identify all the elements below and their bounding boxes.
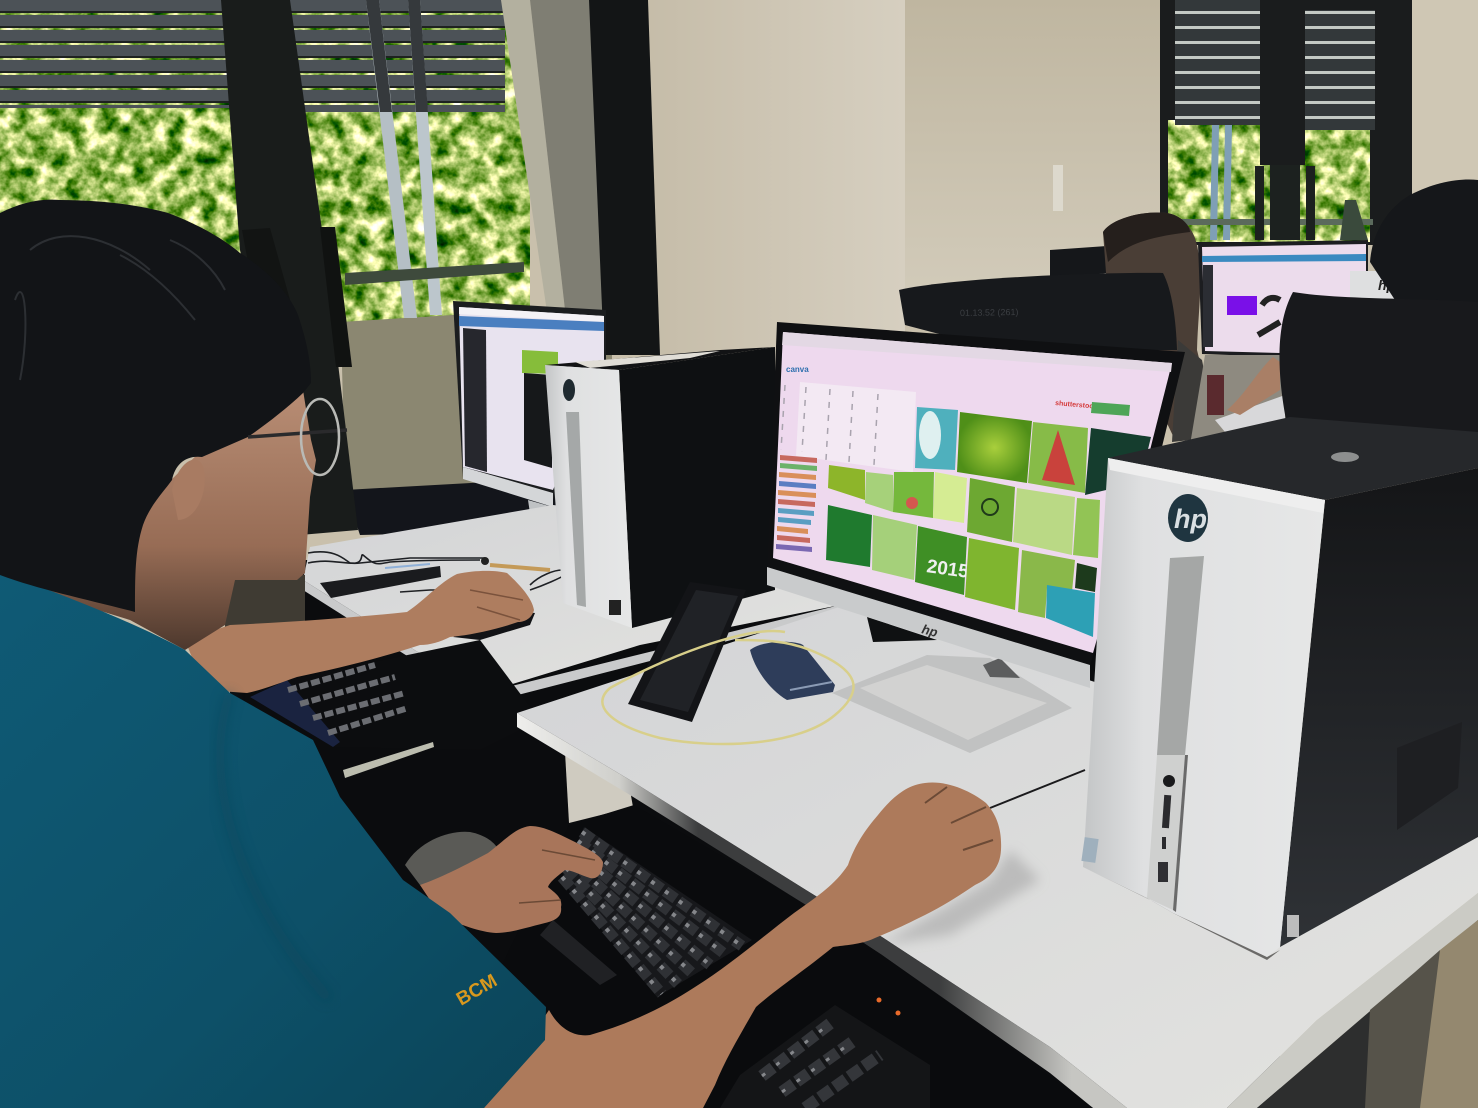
main monitor: 2015 [925,556,971,583]
front keyboard [490,805,1093,1108]
rear monitor [453,301,606,563]
left window with foliage [0,0,660,535]
right person head [1370,180,1478,305]
dropdown menu [796,382,916,472]
icon: hp logo [1168,494,1208,542]
sidebar colored list [776,455,817,552]
door frames [221,0,358,535]
rear arm and hand [185,571,534,693]
yellow cable [602,631,854,744]
chairs: 01.13.52 (261) [960,307,1019,318]
phone on desk [628,582,746,722]
balcony rail [345,262,524,285]
front desk [517,605,1478,1108]
person: BCM [453,971,501,1010]
background person with bun [1103,212,1218,442]
louvers [0,0,235,108]
bottom keyboard [720,998,930,1108]
icon: hp logo: hp [1174,504,1207,534]
background chair [1050,246,1107,280]
neck and face [0,390,316,650]
right window [1160,0,1412,245]
glasses [248,399,347,475]
chairs [899,273,1478,440]
icon: rear hp logo [563,379,575,401]
lower wall [341,305,612,495]
second phone [750,642,835,700]
rear PC tower [545,347,775,628]
desk front edge [517,713,1127,1108]
under desk right [1257,920,1478,1108]
front right arm and hand [484,782,1001,1108]
under-desk darkness [230,560,1280,1108]
stand [832,655,1072,753]
main monitor: hp [920,621,940,640]
sidebar text [781,385,878,465]
desk right edge [1227,893,1478,1108]
shirt fold [220,693,330,1000]
chin shadow area [225,575,305,630]
thumbnails [915,407,958,470]
background monitor: hp [1378,277,1396,293]
main monitor [767,322,1185,753]
screen [773,332,1172,653]
main monitor: canva [786,365,809,374]
shirt [0,572,546,1108]
window bars [366,0,442,318]
rear phone [320,564,441,598]
frame [767,322,1185,665]
desk behind and hand [1190,355,1290,445]
floor outside [345,478,580,535]
wires [308,540,580,592]
rear keyboard [250,640,540,778]
person [0,200,1001,1108]
main monitor: shutterstock [1055,400,1097,411]
rear mouse [453,612,535,640]
background monitor [1198,240,1398,357]
concrete column [501,0,565,312]
mouse cable [990,770,1085,808]
front left hand [420,826,603,933]
grey trousers [405,832,500,885]
main PC tower [1081,417,1478,960]
ear [172,460,205,520]
rear desk [303,505,840,704]
hand shadow on desk [880,850,1040,945]
hair [0,200,311,612]
light patch under desk [565,752,633,823]
